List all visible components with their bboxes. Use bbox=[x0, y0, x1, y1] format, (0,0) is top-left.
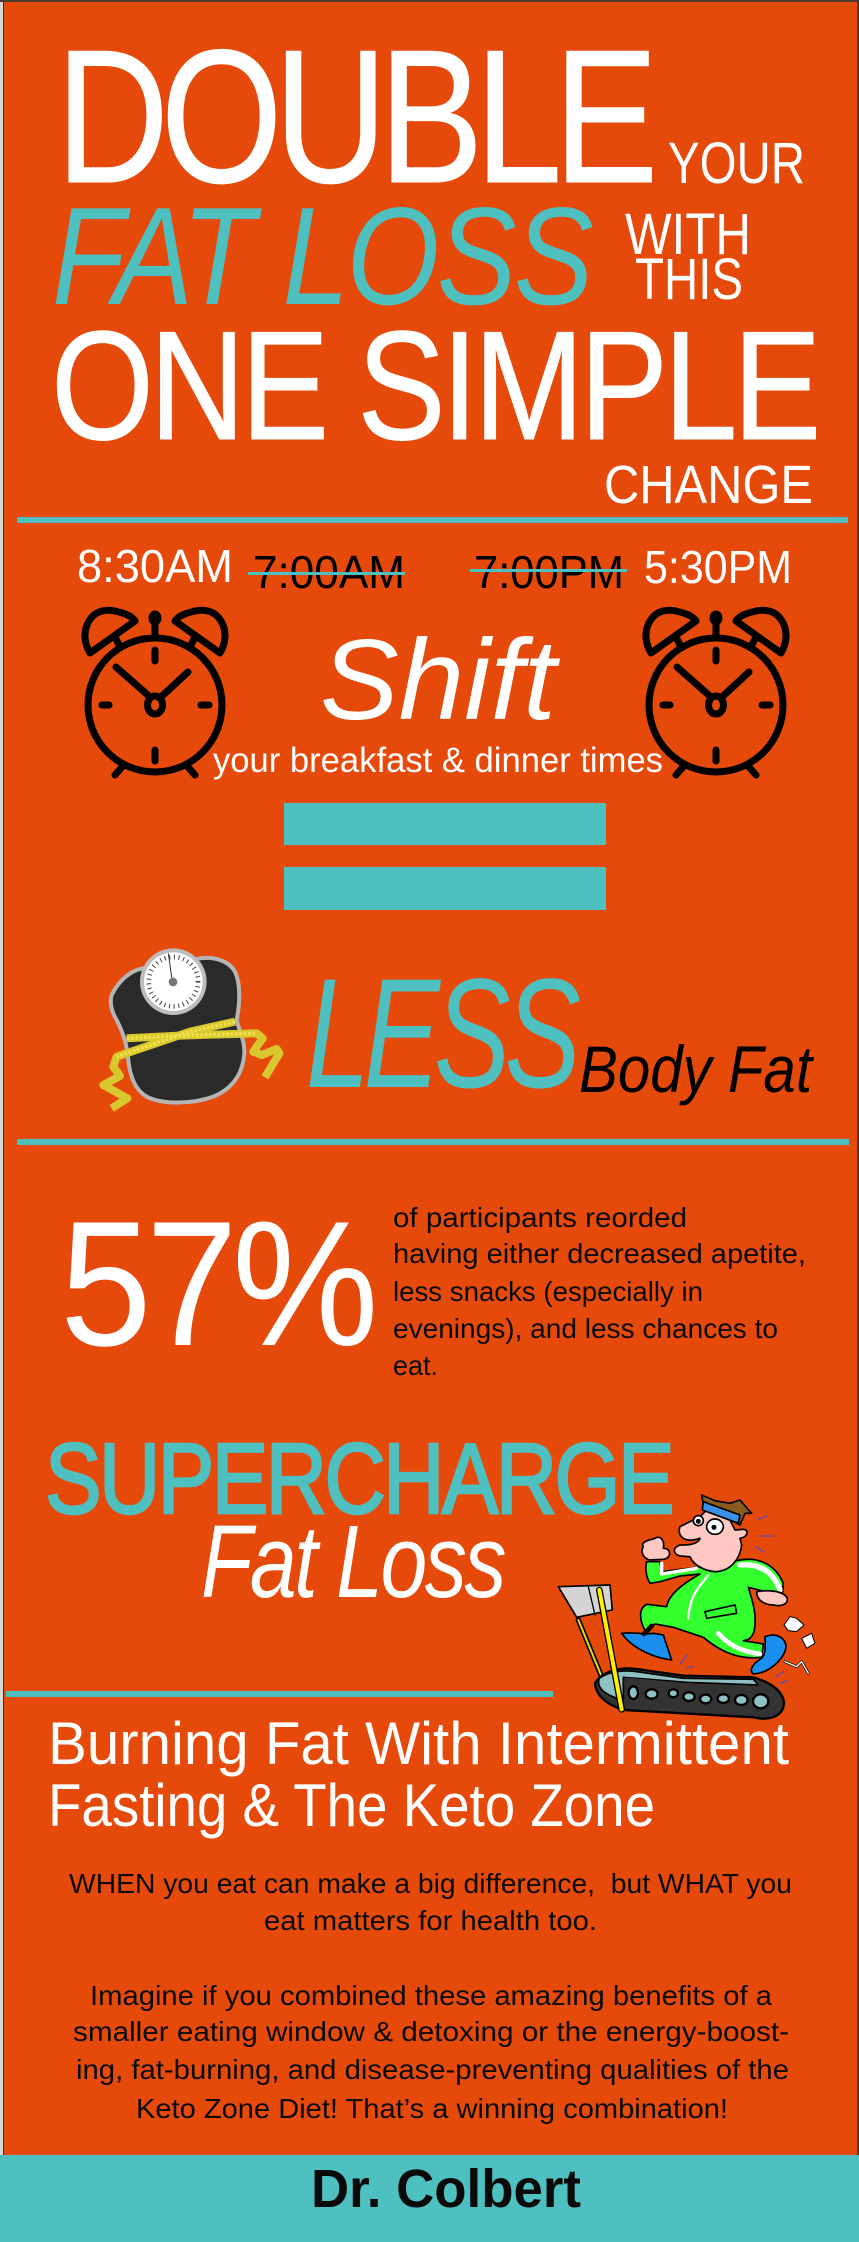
title word: DOUBLE: DOUBLE bbox=[56, 11, 652, 223]
text block: when and what you eat: eat matters for health too. bbox=[264, 1905, 597, 1936]
text block: when and what you eat: smaller eating window & detoxing or the energy-boost- bbox=[73, 2016, 789, 2047]
heading: SUPERCHARGE: SUPERCHARGE bbox=[45, 1423, 672, 1535]
old breakfast time struck through: 7:00AM bbox=[253, 546, 405, 598]
title: Double your fat loss with this one simple change bbox=[51, 11, 817, 515]
heading: burning fat with intermittent fasting and the keto zone: Burning Fat With Intermittent bbox=[48, 1710, 789, 1777]
old dinner time struck through: 7:00PM bbox=[474, 546, 624, 598]
heading: Shift: Shift bbox=[320, 617, 560, 744]
panel: shift meal times bbox=[77, 540, 792, 780]
icon: cartoon man running on treadmill bbox=[558, 1495, 815, 1719]
icon: right alarm clock bbox=[646, 610, 786, 775]
text block: when and what you eat: Imagine if you combined these amazing benefits of a bbox=[90, 1980, 772, 2011]
statistic description: of participants reorded bbox=[393, 1202, 687, 1233]
statistic description: eat. bbox=[393, 1350, 438, 1381]
equals sign bbox=[284, 803, 606, 910]
icon: left alarm clock bbox=[85, 610, 225, 775]
subheading: Body Fat: Body Fat bbox=[579, 1032, 814, 1106]
title word: CHANGE: CHANGE bbox=[604, 455, 813, 515]
statistic description: having either decreased apetite, bbox=[393, 1238, 806, 1269]
statistic description: less snacks (especially in bbox=[393, 1276, 703, 1307]
big number: 57%: 57% bbox=[60, 1184, 373, 1383]
text block: when and what you eat bbox=[69, 1868, 792, 2124]
heading: burning fat with intermittent fasting and the keto zone bbox=[48, 1710, 789, 1839]
statistic description: evenings), and less chances to bbox=[393, 1313, 778, 1344]
footer name: Dr. Colbert: Dr. Colbert bbox=[311, 2159, 581, 2219]
text block: when and what you eat: ing, fat-burning, and disease-preventing qualities of the bbox=[76, 2054, 789, 2085]
footer bar bbox=[0, 2155, 859, 2242]
title phrase: FAT LOSS: FAT LOSS bbox=[52, 179, 593, 334]
title word: YOUR: YOUR bbox=[668, 131, 805, 196]
new breakfast time: 8:30AM bbox=[77, 540, 233, 592]
icon: bathroom scale with measuring tape bbox=[103, 948, 279, 1108]
text block: when and what you eat: Keto Zone Diet! That’s a winning combination! bbox=[136, 2093, 728, 2124]
title word: WITH: WITH bbox=[625, 202, 751, 267]
title word: THIS: THIS bbox=[635, 247, 743, 312]
heading: burning fat with intermittent fasting and the keto zone: Fasting & The Keto Zone bbox=[48, 1772, 655, 1839]
subheading: Fat Loss: Fat Loss bbox=[201, 1504, 505, 1619]
panel: less body fat bbox=[103, 947, 814, 1121]
new dinner time: 5:30PM bbox=[644, 541, 792, 593]
text block: when and what you eat: WHEN you eat can make a big difference, but WHAT you bbox=[69, 1868, 792, 1899]
heading: LESS: LESS bbox=[306, 947, 580, 1121]
subheading: breakfast and dinner times: your breakfast & dinner times bbox=[213, 741, 663, 780]
panel: 57 percent statistic bbox=[60, 1184, 806, 1383]
panel: supercharge fat loss bbox=[45, 1423, 815, 1719]
statistic description bbox=[393, 1202, 806, 1381]
